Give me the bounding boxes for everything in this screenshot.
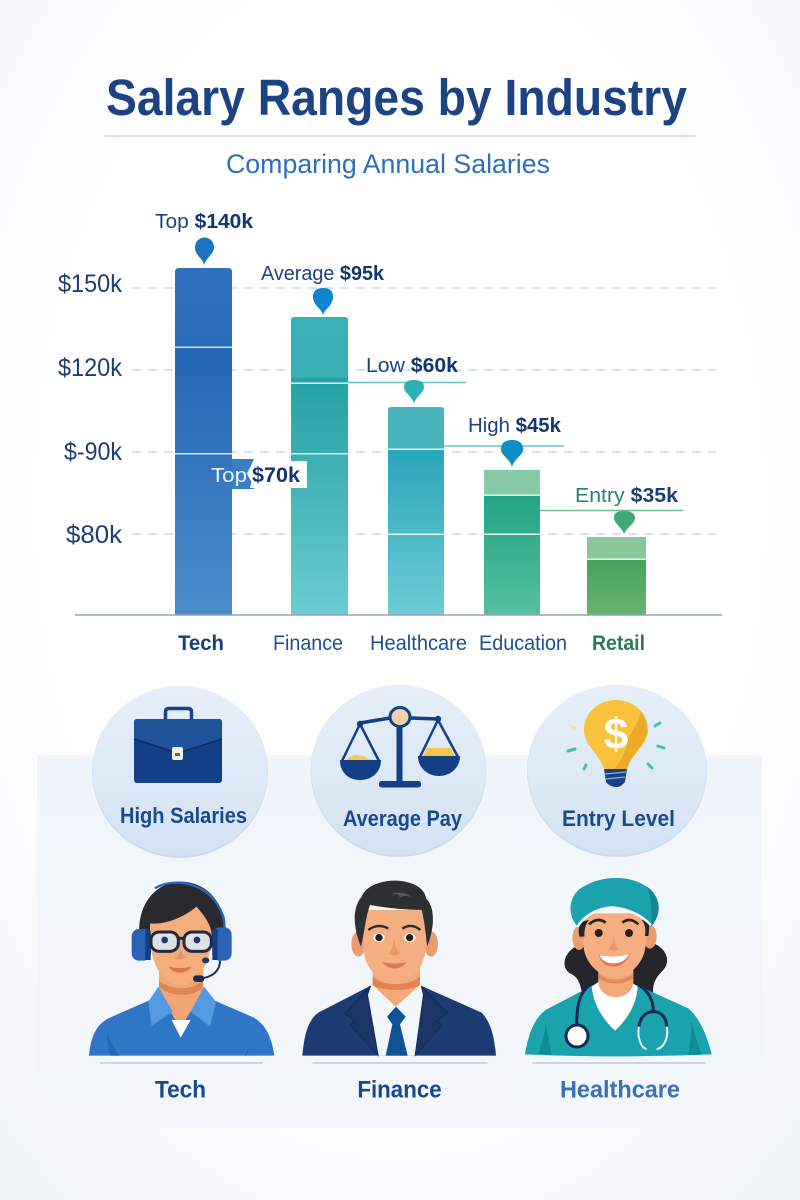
scrubs <box>525 985 712 1056</box>
value labels: High $45k <box>468 415 562 437</box>
underline <box>100 1061 263 1065</box>
face <box>363 910 426 984</box>
icon: balance scale <box>340 708 460 788</box>
earcups <box>132 929 151 961</box>
shirt <box>89 1000 274 1056</box>
jacket <box>302 986 496 1056</box>
title: Salary Ranges by Industry <box>106 69 688 126</box>
neck <box>159 970 203 1028</box>
category labels: Retail <box>592 632 645 655</box>
label: Tech <box>155 1076 206 1103</box>
value labels: Entry $35k <box>575 485 679 507</box>
category labels: Tech <box>178 632 224 655</box>
lapels <box>345 986 447 1056</box>
stethoscope <box>566 985 667 1047</box>
nose and smile <box>388 938 400 955</box>
badge: Entry Level <box>527 685 707 857</box>
icon: light bulb with dollar <box>568 700 664 787</box>
y axis labels: $120k <box>58 354 122 382</box>
neck <box>598 968 633 997</box>
underline <box>312 1061 488 1065</box>
person: Tech <box>89 882 274 1103</box>
microphone <box>200 961 220 979</box>
shirt <box>368 983 423 1056</box>
category labels <box>178 632 645 655</box>
badge: High Salaries: High Salaries <box>120 803 247 828</box>
neck <box>373 967 420 1007</box>
lower panel background <box>37 755 762 1128</box>
face <box>583 913 646 977</box>
bar: Finance <box>291 317 348 615</box>
value labels: Top $140k <box>155 211 254 233</box>
value labels: Average $95k <box>261 263 385 285</box>
callout: Top $70k <box>211 459 307 489</box>
hair <box>565 944 667 995</box>
marker pins <box>195 238 635 534</box>
category labels: Finance <box>273 632 343 655</box>
ears <box>351 931 365 957</box>
y axis labels: $-90k <box>64 438 122 466</box>
label: Finance <box>357 1076 442 1103</box>
callout: Top $70k: Top <box>211 465 247 487</box>
bar: Education <box>484 470 540 615</box>
eyebrows and eyes <box>368 926 420 930</box>
y axis labels <box>58 270 123 549</box>
connector lines <box>348 382 683 510</box>
subtitle: Comparing Annual Salaries <box>226 149 550 179</box>
nose and smile <box>174 948 186 959</box>
ears <box>572 926 586 950</box>
badge: Average Pay <box>310 685 486 857</box>
badge: Average Pay: Average Pay <box>343 806 463 831</box>
bar: Tech <box>175 268 232 615</box>
label: Healthcare <box>560 1076 680 1103</box>
tie <box>386 1007 408 1056</box>
badge: Entry Level: Entry Level <box>562 806 675 831</box>
hair back and headband <box>139 882 224 947</box>
person: Healthcare <box>525 878 712 1103</box>
callout: Top $70k: $70k <box>252 464 300 487</box>
person: Finance <box>302 881 496 1103</box>
bar chart <box>58 211 722 655</box>
undershirt <box>592 970 638 1031</box>
glasses <box>151 932 211 951</box>
underline <box>532 1061 706 1065</box>
nose and smile <box>608 935 619 950</box>
y axis labels: $150k <box>58 270 122 298</box>
face <box>150 907 212 986</box>
icon: light bulb with dollar: $ <box>604 710 628 759</box>
badge: High Salaries <box>92 686 268 858</box>
bar: Retail <box>587 537 646 615</box>
value labels: Low $60k <box>366 355 459 377</box>
collar <box>148 987 216 1027</box>
icon: briefcase <box>134 708 222 783</box>
y axis labels: $80k <box>66 521 123 549</box>
category labels: Education <box>479 632 567 655</box>
value labels <box>155 211 679 507</box>
eyebrows and eyes <box>589 920 638 924</box>
bar: Healthcare <box>388 407 444 615</box>
cap <box>570 878 659 927</box>
category labels: Healthcare <box>370 632 467 655</box>
hair <box>355 881 433 947</box>
